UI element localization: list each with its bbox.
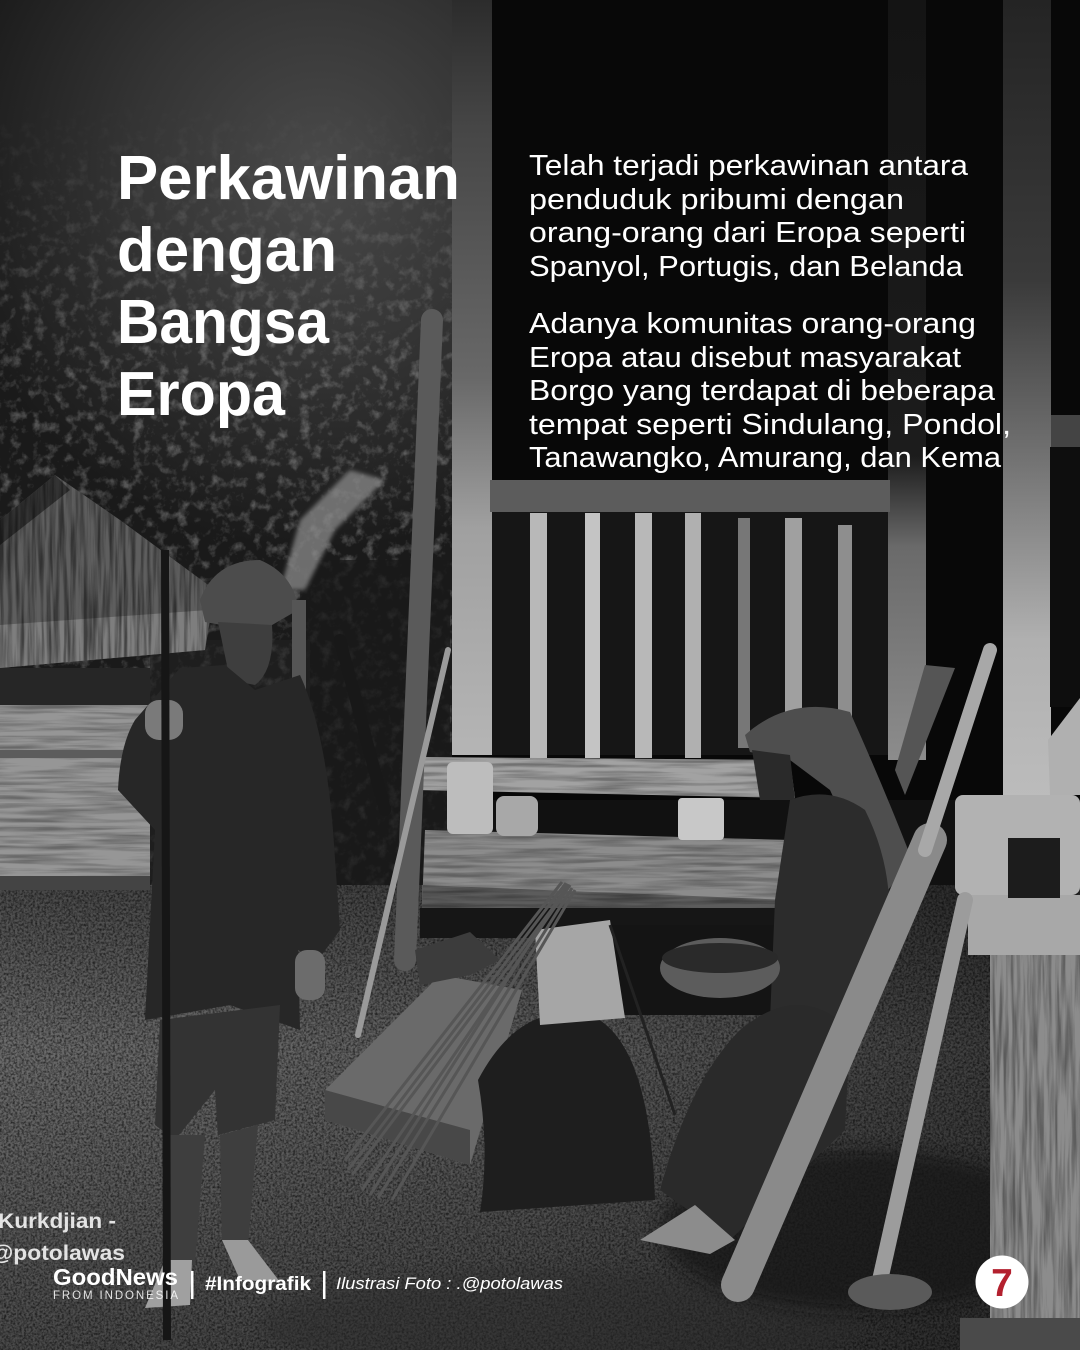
rocks and wood slab [325,920,655,1212]
title: Eropa [117,360,285,429]
logo: GoodNews from Indonesia: GoodNews [53,1264,178,1290]
thatched hut [0,470,220,890]
foundation beam, stones and log [400,750,800,1015]
logo: GoodNews from Indonesia [53,1264,178,1302]
paragraph: Borgo community: Borgo yang terdapat di beberapa [529,375,996,407]
broom [345,882,675,1200]
page number badge: 7 [991,1262,1013,1305]
paragraph: Borgo community: tempat seperti Sindulang, Pondol, [529,409,1011,441]
paragraph: Borgo community: Tanawangko, Amurang, dan Kema [529,442,1002,474]
house dark interior [452,0,1080,800]
footer divider and illustration credit: Ilustrasi Foto : .@potolawas [336,1275,563,1293]
thin leaning poles [340,320,448,1035]
standing man with spear [118,550,340,1340]
paragraph: intermarriage: penduduk pribumi dengan [529,184,904,216]
title [117,144,460,429]
title: dengan [117,216,337,285]
title: Bangsa [117,288,329,357]
hazy sky and tree backdrop [0,0,470,900]
feather ornament [280,470,385,590]
title: Perkawinan [117,144,460,213]
paragraph: Borgo community: Adanya komunitas orang-orang [529,308,976,340]
paragraph: Borgo community [529,308,1011,474]
bamboo poles [738,650,990,1310]
stone gatepost on right [955,698,1080,1350]
footer divider and tag: #Infografik [205,1274,311,1295]
paragraph: intermarriage [529,150,969,283]
paragraph: intermarriage: orang-orang dari Eropa seperti [529,217,966,249]
seated woman [640,707,912,1254]
house structure: posts, beam and slats [452,0,1080,800]
photo credit watermark [0,1210,125,1265]
page number badge [976,1256,1028,1308]
paragraph: intermarriage: Spanyol, Portugis, dan Belanda [529,251,964,283]
ground [0,885,1080,1350]
paragraph: intermarriage: Telah terjadi perkawinan antara [529,150,969,182]
photo credit watermark: Kurkdjian - [0,1210,116,1233]
logo: GoodNews from Indonesia: FROM INDONESIA [53,1290,178,1302]
footer divider and tag [191,1271,311,1299]
paragraph: Borgo community: Eropa atau disebut masyarakat [529,342,961,374]
